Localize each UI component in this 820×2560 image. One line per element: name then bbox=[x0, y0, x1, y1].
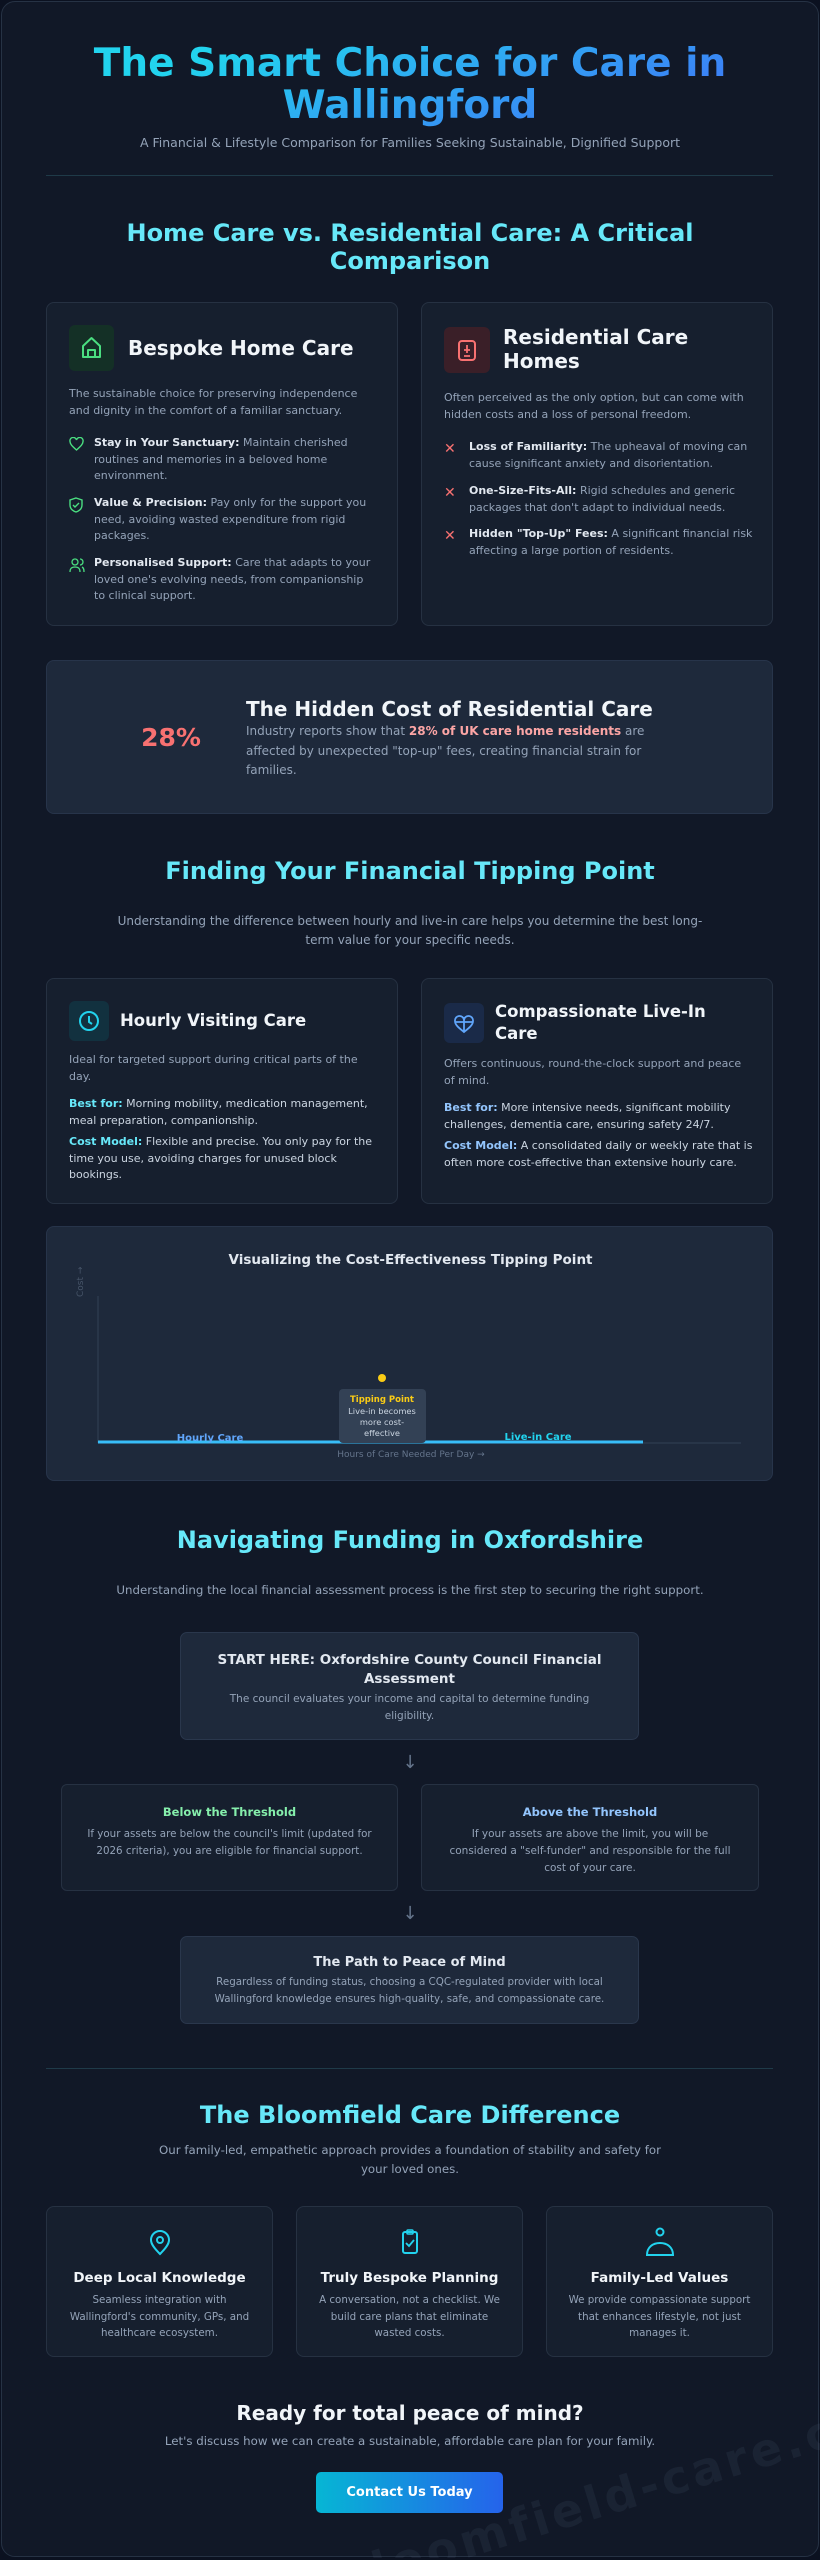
icon: building bbox=[444, 327, 490, 373]
cross list bbox=[444, 440, 752, 556]
panel: residential care homes: ✕ bbox=[444, 485, 456, 501]
heading: funding: Navigating Funding in Oxfordshire bbox=[177, 1526, 643, 1554]
best for: Best for: Morning mobility, medication management, meal preparation, companionship. bbox=[69, 1097, 368, 1126]
panel: bespoke home care: Stay in Your Sanctuary: Maintain cherished routines and memories in a beloved home environment. bbox=[94, 436, 348, 482]
chart: Live-in becomes bbox=[348, 1406, 416, 1416]
flow: peace of mind: Regardless of funding status, choosing a CQC-regulated provider with local Wallingford knowledge ensures high-quality, safe, and compassionate care. bbox=[215, 1976, 604, 2005]
flow: start box: START HERE: Oxfordshire County Council Financial Assessment bbox=[218, 1652, 601, 1687]
icon: person bbox=[646, 2228, 674, 2256]
intro text: Understanding the difference between hourly and live-in care helps you determine the best long-term value for your specific needs. bbox=[118, 914, 702, 947]
heading: difference: The Bloomfield Care Difference bbox=[200, 2101, 620, 2129]
panel: hourly visiting care bbox=[46, 978, 398, 1204]
flow: below threshold: If your assets are below the council's limit (updated for 2026 criteria), you are eligible for financial support. bbox=[87, 1828, 372, 1857]
chart: Live-in Care bbox=[504, 1432, 572, 1443]
heading: tipping point: Finding Your Financial Tipping Point bbox=[165, 857, 655, 885]
card title: Hourly Visiting Care bbox=[120, 1011, 306, 1030]
feature: bespoke planning: Truly Bespoke Planning bbox=[321, 2270, 498, 2286]
icon: pin bbox=[150, 2230, 170, 2256]
panel: residential care homes: ✕ bbox=[444, 528, 456, 544]
panel: residential care homes bbox=[421, 302, 773, 626]
card title: Bespoke Home Care bbox=[128, 336, 354, 360]
panel: residential care homes: Loss of Familiarity: The upheaval of moving can cause significant anxiety and disorientation. bbox=[469, 440, 747, 470]
icon: clock bbox=[69, 1001, 109, 1041]
chart panel: tipping point bbox=[46, 1226, 773, 1481]
flow: above threshold: Above the Threshold bbox=[523, 1805, 657, 1819]
flow: below threshold bbox=[61, 1784, 398, 1891]
chart: Cost → bbox=[76, 1266, 86, 1297]
subtitle: A Financial & Lifestyle Comparison for Families Seeking Sustainable, Dignified Support bbox=[140, 135, 680, 150]
callout title: The Hidden Cost of Residential Care bbox=[246, 697, 653, 721]
cta text: Let's discuss how we can create a sustainable, affordable care plan for your family. bbox=[165, 2434, 655, 2448]
callout text: Industry reports show that 28% of UK care home residents are affected by unexpected "top-up" fees, creating financial strain for families. bbox=[246, 724, 644, 777]
chart bbox=[76, 1266, 741, 1460]
flow: peace of mind: The Path to Peace of Mind bbox=[313, 1955, 506, 1970]
panel: live-in care bbox=[421, 978, 773, 1204]
card title: Residential Care Homes bbox=[503, 325, 688, 373]
description: Offers continuous, round-the-clock support and peace of mind. bbox=[444, 1057, 741, 1086]
feature: local knowledge: Seamless integration with Wallingford's community, GPs, and healthcare ecosystem. bbox=[70, 2294, 249, 2339]
panel: residential care homes: One-Size-Fits-All: Rigid schedules and generic packages that don't adapt to individual needs. bbox=[469, 484, 735, 514]
chart: Hours of Care Needed Per Day → bbox=[337, 1450, 485, 1460]
panel: bespoke home care bbox=[46, 302, 398, 626]
arrow: ↓ bbox=[402, 1903, 418, 1924]
flow: below threshold: Below the Threshold bbox=[163, 1805, 296, 1819]
feature: local knowledge bbox=[46, 2206, 273, 2357]
cta button: Contact Us Today bbox=[346, 2485, 473, 2500]
description: Ideal for targeted support during critical parts of the day. bbox=[69, 1053, 358, 1082]
cta heading: Ready for total peace of mind? bbox=[236, 2401, 584, 2425]
cta button bbox=[316, 2472, 503, 2513]
cost model: Cost Model: Flexible and precise. You only pay for the time you use, avoiding charges for unused block bookings. bbox=[69, 1135, 372, 1181]
best for: Best for: More intensive needs, significant mobility challenges, dementia care, ensuring safety 24/7. bbox=[444, 1101, 730, 1130]
callout: hidden cost bbox=[46, 660, 773, 814]
icon: house bbox=[69, 325, 114, 371]
icon: clipboard bbox=[402, 2229, 418, 2254]
description: Often perceived as the only option, but can come with hidden costs and a loss of personal freedom. bbox=[444, 391, 744, 420]
feature: local knowledge: Deep Local Knowledge bbox=[73, 2270, 246, 2286]
feature: bespoke planning: A conversation, not a checklist. We build care plans that eliminate wasted costs. bbox=[319, 2294, 500, 2339]
panel: bespoke home care: Personalised Support: Care that adapts to your loved one's evolving needs, from companionship to clinical support. bbox=[94, 556, 370, 602]
heading: comparison: Home Care vs. Residential Care: A Critical Comparison bbox=[126, 219, 694, 275]
chart: effective bbox=[364, 1428, 400, 1438]
chart: Hourly Care bbox=[177, 1433, 243, 1444]
feature: family-led bbox=[546, 2206, 773, 2357]
flow: start box bbox=[180, 1632, 639, 1740]
intro text: Our family-led, empathetic approach provides a foundation of stability and safety for your loved ones. bbox=[159, 2143, 661, 2176]
bullet list bbox=[69, 436, 370, 602]
feature: family-led: We provide compassionate support that enhances lifestyle, not just manages it. bbox=[569, 2294, 750, 2339]
stat: 28% bbox=[141, 723, 201, 752]
cost model: Cost Model: A consolidated daily or weekly rate that is often more cost-effective than extensive hourly care. bbox=[444, 1139, 752, 1168]
intro text: Understanding the local financial assessment process is the first step to securing the right support. bbox=[116, 1583, 704, 1597]
flow: above threshold bbox=[421, 1784, 759, 1891]
flow: above threshold: If your assets are above the limit, you will be considered a "self-funder" and responsible for the full cost of your care. bbox=[449, 1828, 731, 1874]
feature: bespoke planning bbox=[296, 2206, 523, 2357]
card title: Compassionate Live-In Care bbox=[495, 1002, 706, 1043]
description: The sustainable choice for preserving independence and dignity in the comfort of a familiar sanctuary. bbox=[69, 387, 357, 416]
panel: residential care homes: ✕ bbox=[444, 441, 456, 457]
panel: bespoke home care: Value & Precision: Pay only for the support you need, avoiding wasted expenditure from rigid packages. bbox=[94, 496, 366, 542]
arrow: ↓ bbox=[402, 1752, 418, 1773]
icon: heart bbox=[444, 1003, 484, 1043]
flow: peace of mind bbox=[180, 1936, 639, 2024]
feature: family-led: Family-Led Values bbox=[591, 2270, 728, 2286]
chart: more cost- bbox=[360, 1417, 404, 1427]
title: The Smart Choice for Care in Wallingford bbox=[94, 41, 726, 128]
flow: start box: The council evaluates your income and capital to determine funding eligibility. bbox=[230, 1693, 589, 1722]
panel: residential care homes: Hidden "Top-Up" Fees: A significant financial risk affecting a large portion of residents. bbox=[469, 527, 752, 556]
chart: Tipping Point bbox=[350, 1395, 414, 1405]
chart title: Visualizing the Cost-Effectiveness Tipping Point bbox=[228, 1252, 593, 1268]
